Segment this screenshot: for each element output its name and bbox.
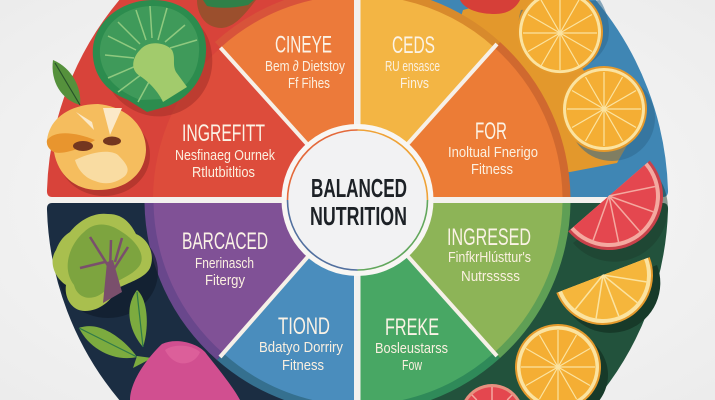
wedge band top yellow: [358, 0, 500, 200]
shadow: top orange: [518, 0, 609, 71]
icon: leaves: [79, 290, 152, 368]
label: BARCACED: Fitergy: [205, 272, 245, 289]
label: FREKE: FREKE: [385, 314, 439, 341]
wheel: inner wedges: [144, 0, 570, 400]
label: FOR: Inoltual Fnerigo: [448, 144, 538, 161]
wedge: TIOND blue: [223, 203, 354, 400]
label: TIOND: TIOND: [278, 313, 330, 340]
label: FOR: [448, 118, 538, 178]
icon: orange slice 2: [561, 66, 647, 152]
label: FOR: FOR: [475, 118, 507, 145]
quadrant: dark green bottom right: [360, 203, 668, 400]
icon: apple slice top: [460, 0, 520, 14]
label: CEDS: RU ensasce: [385, 58, 440, 75]
label: TIOND: Bdatyo Dorriry: [259, 339, 343, 356]
label: INGREFITT: Nesfinaeg Ournek: [175, 147, 275, 164]
icon: orange half wedge: [556, 256, 675, 349]
label: INGRESED: FinfkrHlústtur's: [448, 249, 531, 266]
wedge: BARCACED purple: [154, 203, 354, 353]
icon: small leaf: [53, 60, 80, 105]
label: FOR: Fitness: [471, 161, 513, 178]
wedge: CINEYE orange: [220, 0, 354, 197]
shadow: third orange: [524, 333, 608, 400]
quadrant: blue top right: [360, 0, 668, 197]
wedge: FREKE green: [360, 203, 495, 400]
centre badge: [282, 124, 434, 276]
centre title: BALANCED: [311, 173, 407, 203]
label: INGREFITT: Rtlutbitltios: [192, 164, 255, 181]
icon: orange slice 1: [517, 0, 603, 75]
label: BARCACED: BARCACED: [182, 228, 268, 255]
icon: grapefruit wedge: [565, 161, 693, 284]
label: INGRESED: Nutrsssss: [461, 268, 520, 285]
label: TIOND: [259, 313, 343, 374]
label: CINEYE: CINEYE: [275, 32, 332, 58]
label: BARCACED: [182, 228, 268, 289]
icon: pink fruit: [130, 341, 240, 400]
wedge: INGRESED light green: [360, 203, 562, 352]
label: CEDS: CEDS: [392, 32, 435, 59]
label: TIOND: Fitness: [282, 357, 324, 374]
label: CEDS: Finvs: [400, 75, 429, 92]
wedge band top left: [215, 0, 354, 197]
centre title line 2: NUTRITION: [310, 201, 407, 231]
label: FREKE: Bosleustarss: [375, 340, 448, 357]
icon: broccoli: [93, 0, 212, 116]
label: CINEYE: Bem ∂ Dietstoy: [265, 58, 345, 75]
icon: tree: [53, 214, 158, 318]
label: CINEYE: Ff Fihes: [288, 75, 330, 92]
label: CINEYE: [265, 32, 345, 92]
label: CEDS: [385, 32, 440, 92]
wedge band bottom left purple: [144, 203, 354, 360]
quadrant: red top left: [47, 0, 354, 197]
icon: orange slice 3: [515, 324, 601, 400]
wedge: CEDS yellow: [360, 0, 495, 197]
label: INGREFITT: [175, 120, 275, 181]
wedge: INGREFITT red: [153, 48, 354, 197]
label: FREKE: [375, 314, 448, 374]
shadow: second orange: [569, 75, 655, 161]
icon: yellow fruit: [47, 104, 150, 196]
wedge band top right: [360, 42, 570, 197]
label: INGREFITT: INGREFITT: [182, 120, 265, 147]
ochre band behind citrus: [460, 0, 630, 172]
label: INGRESED: [447, 224, 531, 285]
label: BARCACED: Fnerinasch: [195, 255, 254, 272]
wedge band bottom blue: [217, 203, 354, 400]
quadrant: navy bottom left: [47, 203, 354, 400]
label: INGRESED: INGRESED: [447, 224, 531, 251]
label: FREKE: Fow: [402, 357, 422, 374]
wedge: FOR orange: [360, 48, 562, 197]
icon: brown food at top: [197, 0, 256, 28]
wedge band bottom right: [360, 203, 570, 358]
icon: red citrus bottom: [464, 384, 520, 400]
wedge band bottom green: [360, 203, 500, 400]
